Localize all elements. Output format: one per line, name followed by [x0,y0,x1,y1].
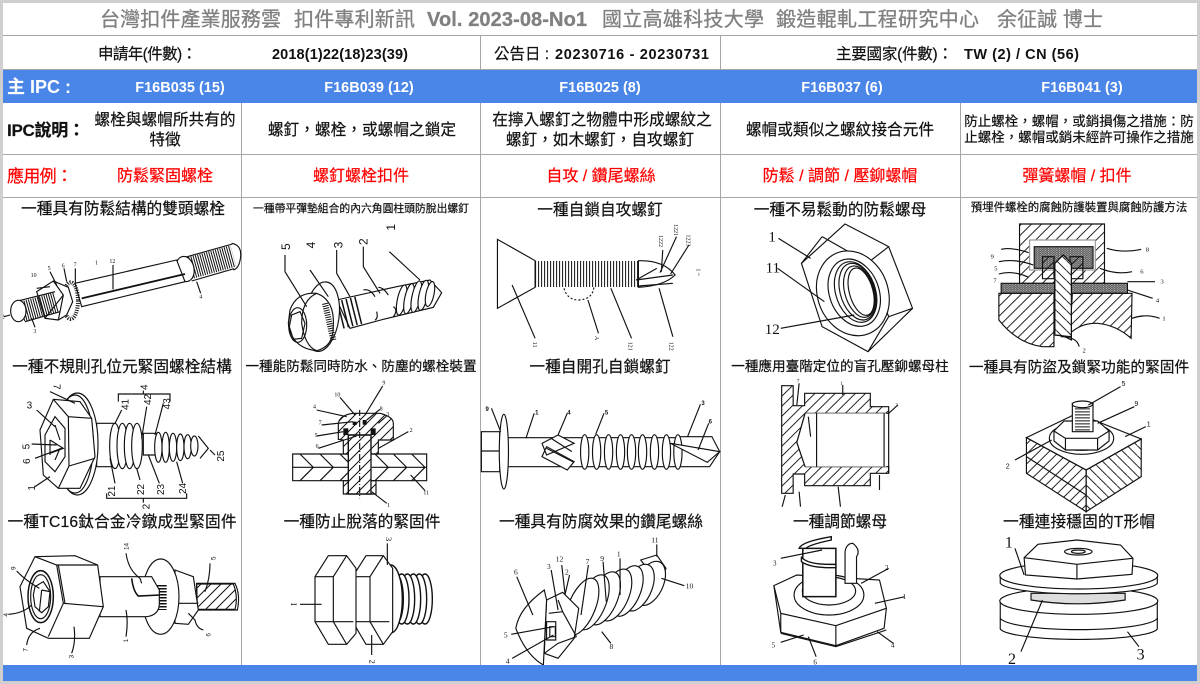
figure: waterproof dustproof bolt section: 7 [319,421,322,427]
figure: embedded bolt corrosion protection section: 1 [1162,316,1166,323]
figure: socket head screw with washer: 2 [356,238,370,245]
figure: adjusting nut: 4 [891,642,895,650]
figure: double-ended stud bolt: 2 [2,314,5,320]
IPC codes: F16B025 (8) [559,80,641,96]
title: 余征誠 博士 [997,8,1103,31]
figure: irregular hole fastening bolt: 7 [50,384,61,390]
figure: embedded bolt corrosion protection section: 2 [1082,348,1086,355]
figure: self-drilling screw: 6 [709,420,713,426]
header row: application years, publication date, countries: 主要國家(件數)： [836,45,953,63]
patent titles row 1: 一種不易鬆動的防鬆螺母 [754,201,926,219]
figure: titanium alloy cold-headed fastener: 14 [123,542,130,550]
figure: waterproof dustproof bolt section: 2 [410,428,413,434]
IPC description col 1: 螺栓與螺帽所共有的 [94,111,236,129]
figure: irregular hole fastening bolt: 25 [216,450,227,462]
figure: self-drilling screw: 9 [486,407,490,413]
header row: application years, publication date, countries: 20230716 - 20230731 [555,47,709,63]
IPC description col 4: 螺帽或類似之螺紋接合元件 [746,121,934,139]
patent titles row 3: 一種調節螺母 [793,512,887,531]
figure: anti-drop fastener with two nuts: 2 [367,660,377,664]
figure: adjusting nut: 5 [772,641,776,649]
IPC description col 5: 止螺栓，螺帽或銷未經許可操作之措施 [964,129,1194,145]
patent titles row 1 [21,200,1187,219]
figure: irregular hole fastening bolt: 4 [140,384,151,390]
header row: application years, publication date, countries: 公告日 : [494,45,549,63]
figure: double-ended stud bolt: 4 [199,295,202,301]
figure: titanium alloy cold-headed fastener: 5 [211,556,218,560]
patent titles row 3: 一種連接穩固的T形帽 [1003,513,1155,531]
figure: irregular hole fastening bolt [21,384,227,509]
IPC description label: IPC說明： [7,121,85,140]
figure: self-drilling screw: 5 [605,410,609,416]
patent titles row 2: 一種自開孔自鎖螺釘 [529,358,671,376]
figure: double-ended stud bolt: 6 [62,263,65,269]
figure: double-ended stud bolt: 5 [48,266,51,272]
application example row [7,166,1132,186]
application examples per column: 防鬆 / 調節 / 壓鉚螺帽 [763,166,917,185]
figure: T-shaped cap [1000,535,1158,668]
figure: irregular hole fastening bolt: 1 [27,485,38,491]
figure: waterproof dustproof bolt section: 3 [386,412,389,418]
title: 扣件專利新訊 [294,8,415,31]
figure: double-ended stud bolt: 1 [95,261,98,267]
figure: anti-corrosion drilling screw: 3 [547,562,551,571]
figure: self-tapping screw: 122 [668,342,674,351]
header row: application years, publication date, countries: TW (2) / CN (56) [964,47,1079,63]
figure: anti-corrosion drilling screw: 7 [586,557,590,566]
figure: waterproof dustproof bolt section: 9 [382,381,385,387]
figure: anti-theft fastener on block: 9 [1134,401,1138,408]
IPC codes: F16B041 (3) [1041,80,1123,96]
IPC description col 3: 螺釘，如木螺釘，自攻螺釘 [506,131,694,149]
figure: anti-drop fastener with two nuts: I [289,603,299,606]
figure: double-ended stud bolt: 3 [33,329,36,335]
figure: titanium alloy cold-headed fastener: 6 [206,633,213,637]
figure: self-tapping screw: 1222 [657,235,663,247]
IPC codes: F16B035 (15) [135,80,225,96]
figure: adjusting nut: 6 [813,658,817,666]
figure: blind hole clinch nut standoff section [782,379,899,507]
figure: T-shaped cap: 2 [1008,651,1016,668]
IPC description col 5: 防止螺栓，螺帽，或銷損傷之措施：防 [964,113,1194,129]
patent titles row 2 [12,358,1189,376]
patent titles row 3 [8,512,1155,531]
figure: waterproof dustproof bolt section: 4 [313,405,316,411]
figure: irregular hole fastening bolt: 2 [141,503,152,509]
IPC description row [7,111,1194,149]
bottom blue band [3,665,1197,681]
patent titles row 1: 預埋件螺栓的腐蝕防護裝置與腐蝕防護方法 [971,200,1187,214]
IPC description col 2: 螺釘，螺栓，或螺帽之鎖定 [268,121,456,139]
figure: double-ended stud bolt [2,243,241,335]
figure: blind hole clinch nut standoff section: 1 [840,382,843,387]
figure: embedded bolt corrosion protection section: 5 [994,266,998,273]
figure: socket head screw with washer: 4 [304,241,318,248]
figure: irregular hole fastening bolt: 42 [143,393,154,405]
figure: T-shaped cap: 3 [1137,646,1145,663]
figure: titanium alloy cold-headed fastener: 9 [11,566,18,570]
figure: anti-corrosion drilling screw: 4 [506,656,510,665]
figure: titanium alloy cold-headed fastener: 4 [3,613,10,617]
figure: anti-corrosion drilling screw: 8 [609,642,613,651]
header row: application years, publication date, countries: 申請年(件數)： [98,45,197,63]
figure: double-ended stud bolt: 10 [31,273,37,279]
figure: socket head screw with washer: 3 [332,241,346,248]
title [100,8,1103,31]
figure: self-tapping screw: A [593,336,599,341]
figure: embedded bolt corrosion protection section: 6 [1140,268,1144,275]
application example label: 應用例： [7,166,73,186]
figure: anti-corrosion drilling screw: 11 [651,535,659,544]
application examples per column: 自攻 / 鑽尾螺絲 [546,167,656,185]
IPC codes: F16B037 (6) [801,80,883,96]
figure: adjusting nut [772,537,906,666]
IPC description col 1: 特徵 [149,131,181,149]
figure: adjusting nut: 1 [902,593,906,601]
figure: self-tapping screw: 1 ~ [695,268,701,277]
patent titles row 2: 一種應用臺階定位的盲孔壓鉚螺母柱 [731,358,949,374]
figure: irregular hole fastening bolt: 43 [162,398,173,409]
figure: blind hole clinch nut standoff section: 7 [797,379,800,384]
patent titles row 2: 一種具有防盜及鎖緊功能的緊固件 [969,359,1189,376]
figure: anti-loosening hex nut: 12 [765,322,780,338]
figure: embedded bolt corrosion protection section: 4 [1156,298,1160,305]
figure: embedded bolt corrosion protection section: 9 [991,253,994,260]
patent titles row 3: 一種防止脫落的緊固件 [284,513,440,531]
patent titles row 3: 一種具有防腐效果的鑽尾螺絲 [499,513,703,531]
title: 國立高雄科技大學 [602,8,764,31]
figure: anti-corrosion drilling screw [504,535,693,665]
figure: anti-corrosion drilling screw: 9 [600,554,604,563]
figure: anti-corrosion drilling screw: 6 [514,567,518,576]
figure: anti-theft fastener on block: 2 [1006,463,1010,470]
figure: irregular hole fastening bolt: 41 [120,398,131,410]
patent titles row 2: 一種能防鬆同時防水、防塵的螺栓裝置 [245,358,477,374]
application examples per column: 防鬆緊固螺栓 [117,166,213,185]
patent titles row 1: 一種自鎖自攻螺釘 [537,201,663,219]
figure: embedded bolt corrosion protection section: 7 [993,278,997,285]
figure: embedded bolt corrosion protection section: 8 [1146,247,1149,254]
title: Vol. 2023-08-No1 [427,9,587,31]
figure: self-tapping screw: 1221 [672,224,678,236]
figure: titanium alloy cold-headed fastener: 1 [123,638,130,642]
figure: anti-loosening hex nut: 11 [766,261,780,277]
IPC codes: F16B039 (12) [324,80,414,96]
figure: adjusting nut: 3 [773,560,777,568]
patent titles row 3: 一種TC16鈦合金冷鐓成型緊固件 [8,513,236,531]
figure: anti-theft fastener on block: 5 [1121,381,1125,388]
IPC row label: 主 IPC : [7,77,71,97]
figure: socket head screw with washer: 5 [279,243,293,250]
figure: socket head screw with washer [279,224,442,354]
figure: titanium alloy cold-headed fastener: 7 [22,648,29,652]
patent titles row 2: 一種不規則孔位元緊固螺栓結構 [12,358,232,376]
title: 台灣扣件產業服務雲 [100,8,281,31]
figure: irregular hole fastening bolt: 23 [156,483,167,495]
figure: waterproof dustproof bolt section: 8 [380,406,383,412]
header row: application years, publication date, countries [98,45,1079,63]
figure: embedded bolt corrosion protection section [991,224,1166,355]
figure: waterproof dustproof bolt section: 6 [316,444,319,450]
figure: double-ended stud bolt: 12 [109,259,115,265]
figure: self-tapping screw: 11 [531,342,537,347]
figure: self-drilling screw [481,401,720,489]
figure: self-tapping screw: 1223 [685,234,691,246]
figure: irregular hole fastening bolt: 5 [21,443,32,449]
IPC codes [135,80,1123,96]
figure: self-tapping screw [497,224,701,351]
figure: anti-corrosion drilling screw: 10 [686,581,693,590]
figure: anti-loosening hex nut [765,224,913,352]
application examples per column: 彈簧螺帽 / 扣件 [1022,167,1132,185]
figure: waterproof dustproof bolt section: 1 [387,503,390,509]
figure: anti-corrosion drilling screw: 5 [504,631,508,640]
figure: embedded bolt corrosion protection section: 3 [1161,278,1164,285]
figure: T-shaped cap: 1 [1005,535,1013,552]
IPC description col 3: 在擰入螺釘之物體中形成螺紋之 [492,111,712,129]
figure: waterproof dustproof bolt section: 10 [334,393,340,399]
figure: self-drilling screw: 3 [701,401,705,407]
figure: socket head screw with washer: 1 [384,224,398,231]
figure: titanium alloy cold-headed fastener [3,542,239,658]
figure: irregular hole fastening bolt: 3 [27,400,33,411]
blue IPC row [3,70,1197,103]
figure: irregular hole fastening bolt: 6 [22,458,33,464]
figure: anti-loosening hex nut: 1 [768,230,776,246]
header row: application years, publication date, countries: 2018(1)22(18)23(39) [272,47,408,63]
figure: self-drilling screw: 4 [567,410,571,416]
figure: waterproof dustproof bolt section: 11 [423,491,429,497]
figure: anti-corrosion drilling screw: 2 [565,567,569,576]
title: 鍛造輥軋工程研究中心 [776,8,979,31]
figure: double-ended stud bolt: 7 [74,263,77,269]
figure: blind hole clinch nut standoff section: 3 [896,404,899,409]
application examples per column: 螺釘螺栓扣件 [313,167,409,185]
figure: anti-drop fastener with two nuts: 3 [384,537,394,541]
figure: anti-corrosion drilling screw: 1 [617,550,621,559]
figure: self-tapping screw: 121 [626,342,632,351]
figure: self-drilling screw: 1 [535,410,539,416]
figure: irregular hole fastening bolt: 22 [136,483,147,495]
figure: irregular hole fastening bolt: 24 [178,482,189,494]
figure: anti-theft fastener on block: 1 [1147,421,1151,428]
figure: irregular hole fastening bolt: 21 [107,485,118,497]
figure: anti-corrosion drilling screw: 12 [556,555,564,564]
patent titles row 1: 一種帶平彈墊組合的內六角圓柱頭防脫出螺釘 [253,201,469,215]
figure: waterproof dustproof bolt section [293,381,429,509]
figure: anti-drop fastener with two nuts [289,537,432,664]
figure: adjusting nut: 2 [885,564,889,572]
patent titles row 1: 一種具有防鬆結構的雙頭螺栓 [21,200,225,218]
figure: titanium alloy cold-headed fastener: 3 [68,654,75,658]
figure: anti-theft fastener on block [1006,381,1151,512]
figure: waterproof dustproof bolt section: 5 [315,433,318,439]
application examples per column [117,166,1132,185]
